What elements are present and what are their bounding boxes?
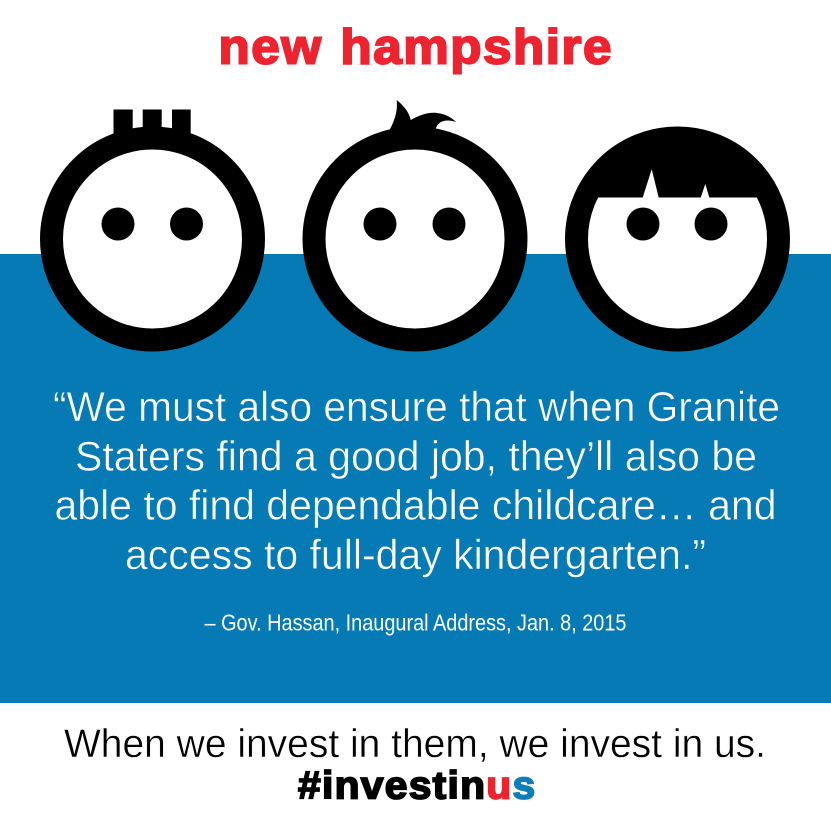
icon: child face with bangs (576, 135, 778, 340)
quote text: access to full-day kindergarten.” (125, 531, 706, 578)
icon: child face with curl (314, 100, 516, 340)
quote text: “We must also ensure that when Granite (53, 383, 780, 430)
blue background band (0, 254, 831, 703)
title: new hampshire (218, 20, 613, 74)
hashtag: #investin us (298, 765, 536, 808)
quote text (53, 383, 780, 578)
tagline: When we invest in them, we invest in us. (64, 722, 766, 766)
quote text: Staters find a good job, they’ll also be (75, 432, 757, 479)
attribution: – Gov. Hassan, Inaugural Address, Jan. 8, 2015 (204, 610, 626, 636)
quote text: able to find dependable childcare… and (54, 482, 776, 529)
icon: child face with spiky hair (52, 110, 254, 340)
